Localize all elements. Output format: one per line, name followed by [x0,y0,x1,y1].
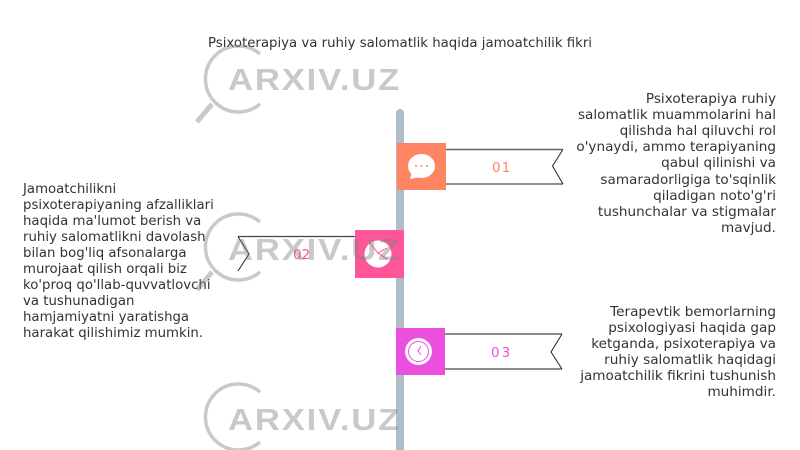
text block: point 03: Terapevtik bemorlarning [609,304,776,320]
text block: point 02: Jamoatchilikni [22,182,116,197]
icon square 02: pie chart [355,230,404,278]
text block: point 03: jamoatchilik fikrini tushunish [579,368,776,384]
text block: point 02: haqida ma'lumot berish va [23,214,201,229]
text block: point 01 [576,91,776,236]
text block: point 01: Psixoterapiya ruhiy [646,91,776,107]
text block: point 02: psixoterapiyaning afzalliklari [23,198,214,213]
text block: point 02: hamjamiyatni yaratishga [23,310,189,325]
text block: point 01: o'ynaydi, ammo terapiyaning [576,139,776,155]
watermark: middle: ARXIV.UZ [228,232,401,267]
text block: point 02: ruhiy salomatlikni davolash [23,230,206,245]
label 03: 03 [491,345,512,361]
text block: point 01: tushunchalar va stigmalar [598,204,776,220]
banner 03 [445,334,562,369]
text block: point 03: ruhiy salomatlik haqidagi [604,352,776,368]
text block: point 02 [22,182,214,341]
text block: point 03: muhimdir. [707,384,776,400]
text block: point 01: qiladigan noto'g'ri [653,188,776,204]
text block: point 03 [579,304,776,400]
text block: point 01: samaradorligiga to'sqinlik [600,172,776,188]
text block: point 01: salomatlik muammolarini hal [578,107,776,123]
watermark: middle [197,214,401,290]
label 01: 01 [492,160,511,176]
watermark: bottom: ARXIV.UZ [228,402,401,437]
watermark: top [197,46,401,122]
timeline bar [396,109,404,450]
text block: point 02: ko'proq qo'llab-quvvatlovchi [23,278,211,293]
icon square 01: speech bubble [397,143,446,190]
text block: point 02: va tushunadigan [23,294,134,309]
watermark: top: ARXIV.UZ [228,62,401,97]
text block: point 01: mavjud. [721,220,776,236]
text block: point 02: bilan bog'liq afsonalarga [23,246,186,261]
icon square 03: clock [396,328,445,375]
text block: point 02: harakat qilishimiz mumkin. [23,326,203,341]
text block: point 02: murojaat qilish orqali biz [23,262,187,277]
banner 02 [238,236,355,271]
text block: point 01: qabul qilinishi va [661,155,776,171]
label 02: 02 [293,247,310,263]
banner 01 [446,150,563,184]
title: Psixoterapiya va ruhiy salomatlik haqida jamoatchilik fikri [208,36,592,51]
watermark: bottom [205,384,401,450]
text block: point 03: psixologiyasi haqida gap [608,320,776,336]
text block: point 03: ketganda, psixoterapiya va [591,336,776,352]
text block: point 01: qilishda hal qiluvchi rol [620,123,776,139]
